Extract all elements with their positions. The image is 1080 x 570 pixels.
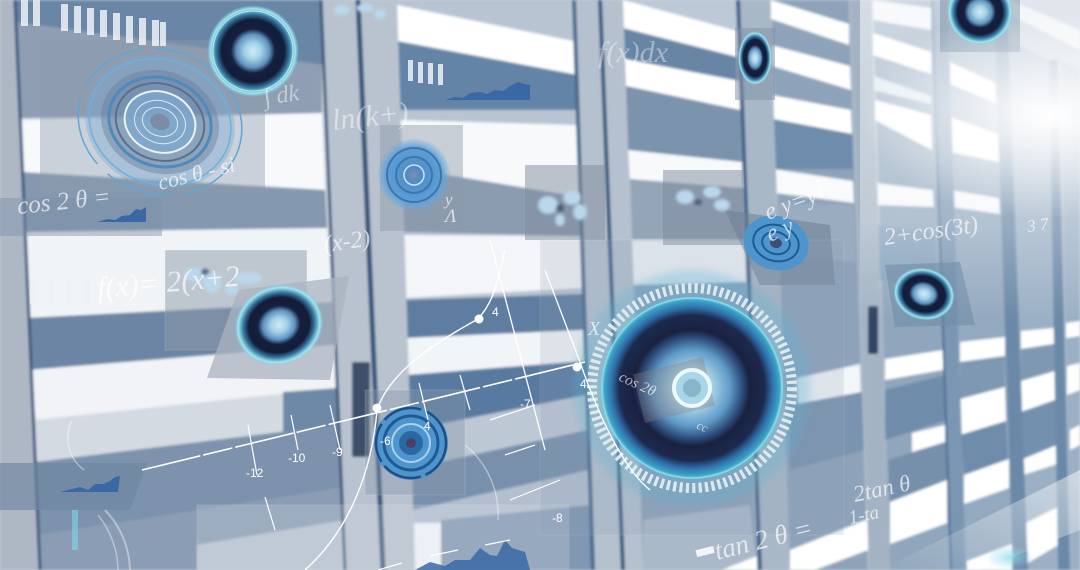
- handwritten formulas: 2+cos(3t): [882, 212, 980, 251]
- handwritten formulas: 3 7: [1025, 214, 1051, 236]
- handwritten formulas: cos θ - si: [155, 152, 238, 195]
- frame: second divider: [574, 0, 643, 570]
- handwritten formulas: 2tan θ: [851, 470, 913, 507]
- axis numbers: [246, 305, 587, 525]
- ring target: top right: [947, 0, 1013, 45]
- ring target: blue upper middle: [378, 139, 450, 211]
- ring target: bottom right glow: [985, 545, 1035, 570]
- handwritten formulas: cos 2 θ =: [16, 183, 112, 220]
- handwritten formulas: f(x)dx: [598, 36, 669, 69]
- bay: eighth cabinet: [1060, 60, 1080, 570]
- handwritten formulas: ∫ dk: [260, 80, 301, 112]
- ring target: large rings upper left: [57, 26, 263, 218]
- axis numbers: -7: [520, 397, 531, 411]
- handwritten formulas: 1-ta: [847, 502, 881, 529]
- ring target: dark left middle: [223, 272, 335, 378]
- white tag beside tangent formula: [696, 546, 715, 557]
- handwritten formulas: tan 2 θ =: [711, 513, 815, 566]
- ring target: large central lens: [574, 270, 810, 506]
- axis numbers: -8: [552, 511, 563, 525]
- handwritten formulas: ln(k+): [330, 96, 410, 137]
- frame: third divider: [736, 0, 790, 570]
- axis numbers: -9: [332, 445, 343, 459]
- handwritten formulas: e y=y²: [761, 180, 828, 226]
- haze: lower right streak: [880, 470, 1080, 570]
- frame: fifth divider: [931, 0, 966, 570]
- bay: first cabinet: [15, 0, 345, 570]
- handwritten formulas: (x-2): [322, 226, 372, 258]
- frame: first divider: [321, 0, 415, 570]
- ring target: blue lower middle: [374, 406, 448, 480]
- handwritten formulas: cos 2θ: [616, 369, 659, 400]
- handwritten formulas: e y: [763, 213, 798, 248]
- ring target: blue disc right of lens: [737, 208, 815, 278]
- axis numbers: 4: [424, 419, 431, 433]
- cabinet top edge: [1005, 0, 1080, 50]
- axis numbers: 4: [580, 377, 587, 391]
- ring target: narrow top: [738, 31, 772, 85]
- map fragments: [184, 4, 730, 295]
- axis numbers: -12: [246, 466, 264, 480]
- bay: sixth cabinet: [949, 20, 1014, 570]
- haze: washed-out upper right: [860, 0, 1080, 320]
- frame: seventh divider: [1049, 60, 1070, 570]
- cyan light streak lower left: [72, 510, 78, 550]
- axis numbers: -6: [380, 434, 391, 448]
- glare: top right light: [860, 10, 1080, 220]
- bay: second cabinet: [397, 0, 600, 570]
- axis numbers: -10: [288, 451, 306, 465]
- axis numbers: 4: [492, 305, 499, 319]
- bay: fourth cabinet: [771, 0, 868, 570]
- handwritten formulas: y: [443, 190, 453, 209]
- handwritten formulas: Λ: [443, 206, 457, 227]
- frame: left edge: [0, 0, 40, 570]
- ring target: dark top centre: [207, 5, 299, 97]
- frame: sixth divider: [995, 30, 1028, 570]
- bay: seventh cabinet: [1008, 40, 1060, 570]
- rack tick marks: [21, 0, 443, 304]
- ring target: right middle: [887, 261, 961, 327]
- handwritten formulas: f(x)= 2(x+2: [96, 260, 241, 305]
- frame: fourth divider: [850, 0, 890, 570]
- arc decoration lower left: [68, 420, 498, 570]
- coordinate graph: [142, 240, 650, 570]
- small area charts: [60, 82, 530, 570]
- bay: fifth cabinet: [873, 0, 950, 570]
- handwritten formulas: cc: [695, 418, 711, 436]
- bay: third cabinet: [623, 0, 757, 570]
- handwritten formulas: X: [587, 318, 601, 340]
